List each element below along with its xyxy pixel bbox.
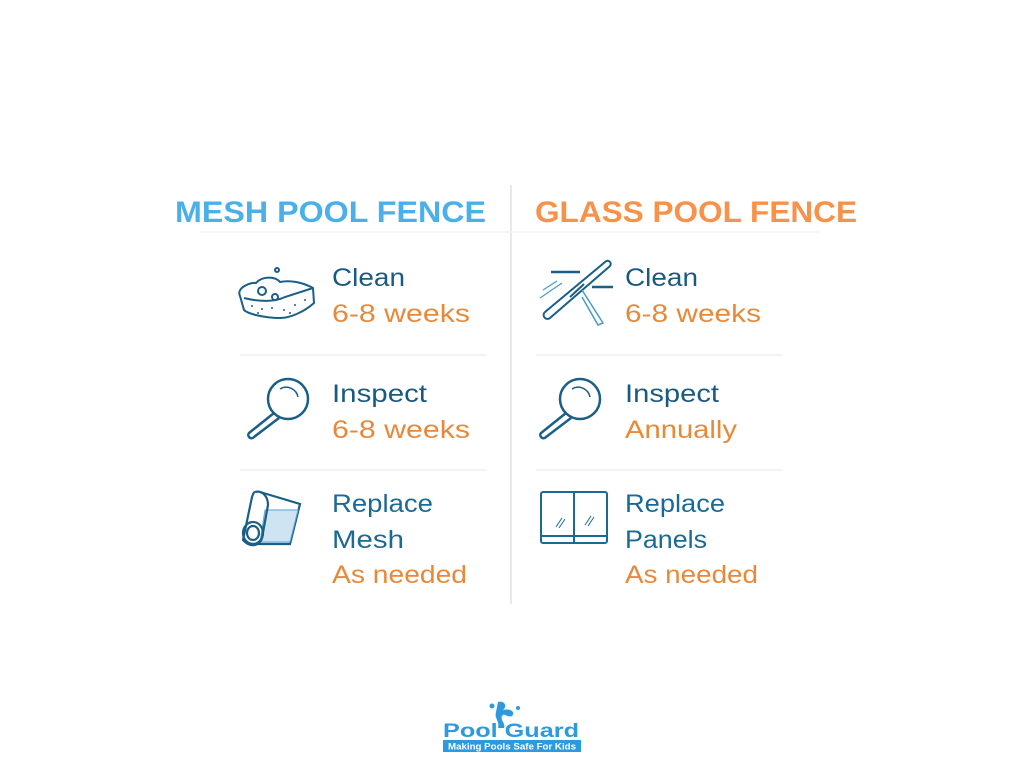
text: mesh inspect: Inspect (332, 380, 427, 408)
text: mesh replace: Mesh (332, 526, 404, 554)
text: mesh clean: Clean (332, 264, 405, 292)
text: glass replace: As needed (625, 561, 758, 589)
icon: magnifier glass (540, 379, 600, 438)
text: glass inspect: Inspect (625, 380, 719, 408)
text: glass inspect (625, 380, 738, 444)
logo: pool guard: Making Pools Safe For Kids (448, 742, 576, 752)
text: mesh inspect: 6-8 weeks (332, 416, 470, 444)
text: mesh replace: Replace (332, 490, 433, 518)
text: glass clean: Clean (625, 264, 698, 292)
icon: magnifier mesh (248, 379, 308, 438)
text: glass clean (625, 264, 761, 328)
heading: glass pool fence: GLASS POOL FENCE (535, 196, 857, 229)
heading: mesh pool fence: MESH POOL FENCE (175, 196, 486, 229)
icon: mesh roll (243, 492, 300, 545)
text: mesh clean (332, 264, 470, 328)
text: glass clean: 6-8 weeks (625, 300, 761, 328)
logo: pool guard (443, 702, 581, 752)
icon: glass panels (541, 492, 607, 543)
text: glass replace: Replace (625, 490, 725, 518)
icon: squeegee (540, 261, 613, 325)
text: mesh replace: As needed (332, 561, 467, 589)
text: glass replace (625, 490, 758, 589)
logo: pool guard: Pool Guard (443, 721, 579, 742)
text: glass inspect: Annually (625, 416, 738, 444)
text: mesh replace (332, 490, 467, 589)
text: glass replace: Panels (625, 526, 707, 554)
icon: sponge (239, 268, 314, 318)
text: mesh clean: 6-8 weeks (332, 300, 470, 328)
text: mesh inspect (332, 380, 470, 444)
